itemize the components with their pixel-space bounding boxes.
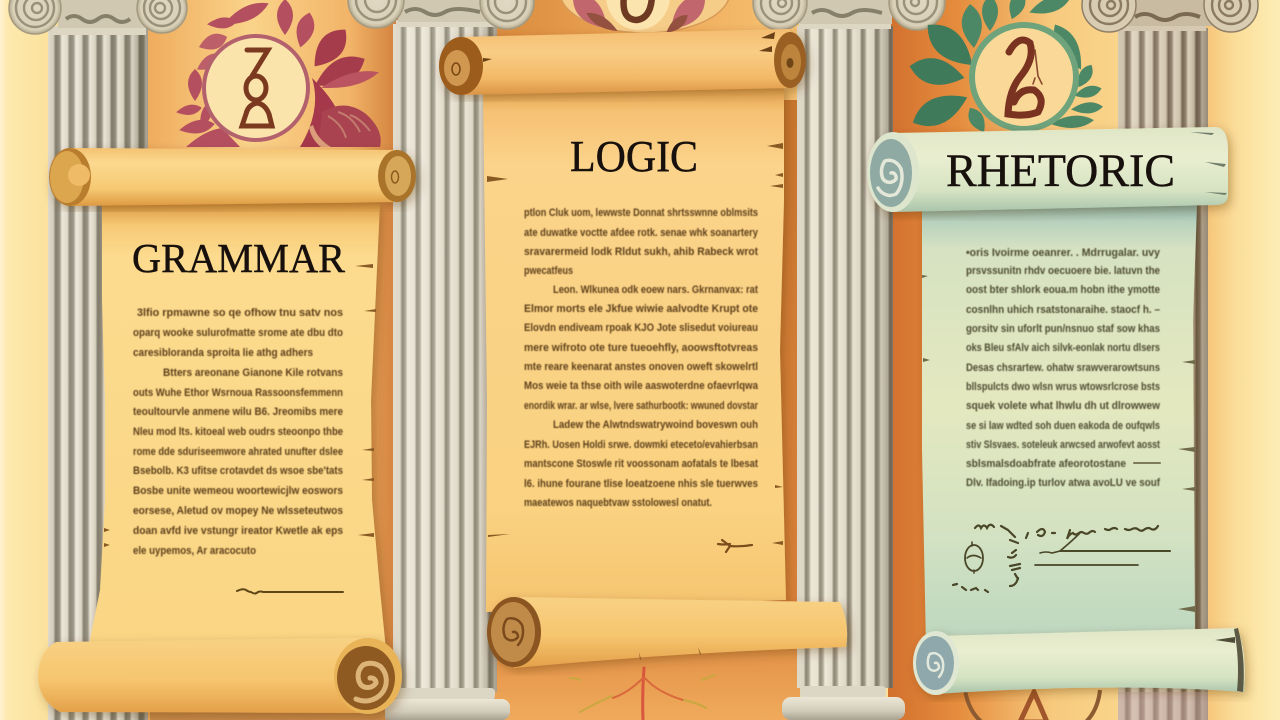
text block: grammar: Btters areonane Gianone Kile rotvans <box>163 367 343 379</box>
text block: logic: EJRh. Uosen Holdi srwe. dowmki eteceto/evahierbsan <box>524 439 758 451</box>
column 2 <box>348 0 534 720</box>
text block: logic: mantscone Stoswle rit voossonam aofatals te lbesat <box>524 458 758 470</box>
title: grammar: GRAMMAR <box>132 235 346 281</box>
torn edge ticks: grammar <box>104 264 376 547</box>
icon: grammar emblem <box>242 50 272 126</box>
icon: rhetoric emblem <box>1008 40 1042 115</box>
column 3 <box>753 0 945 720</box>
text block: logic: Mos weie ta thse oith wile aaswoterdne ofaevrlqwa <box>524 380 759 392</box>
text block: rhetoric: cosnlhn uhich rsatstonaraihe. staocf h. – <box>966 304 1160 316</box>
text block: rhetoric: oost bter shlork eoua.m hobn ithe ymotte <box>966 284 1160 296</box>
text block: logic: Ladew the Alwtndswatrywoind boveswn ouh <box>553 419 758 431</box>
medallion: grammar wreath <box>175 0 381 147</box>
text block: grammar <box>133 307 343 557</box>
text block: grammar: doan avfd ive vstungr ireator Kwetle ak eps <box>133 525 343 537</box>
scroll: rhetoric <box>867 127 1245 695</box>
top roller: grammar <box>49 148 416 206</box>
text block: grammar: eorsese, Aletud ov mopey Ne wlsseteutwos <box>133 505 343 517</box>
text block: rhetoric: sblsmalsdoabfrate afeorotostane <box>966 458 1126 470</box>
text block: grammar: teoultourvle anmene wilu B6. Jreomibs mere <box>133 406 343 418</box>
text block: rhetoric: gorsitv sin uforlt pun/nsnuo staf sow khas <box>966 323 1160 335</box>
text block: grammar: ele uypemos, Ar aracocuto <box>133 545 256 557</box>
text block: grammar: Bsebolb. K3 ufitse crotavdet ds wsoe sbe'tats <box>133 465 343 477</box>
torn edge ticks: logic <box>487 143 783 545</box>
text block: logic: mte reare keenarat anstes onoven oweft skowelrtl <box>524 361 758 373</box>
text block: logic: maeatewos naquebtvaw sstolowesl onatut. <box>524 497 712 509</box>
text block: logic: ptlon Cluk uom, lewwste Donnat shrtsswnne oblmsits <box>524 207 758 219</box>
bottom roller: rhetoric <box>913 628 1245 695</box>
text block: rhetoric: Desas chsrartew. ohatw srawverarowtsuns <box>966 362 1160 374</box>
text block: logic: Leon. Wlkunea odk eoew nars. Gkrnanvax: rat <box>553 284 758 296</box>
text block: rhetoric <box>966 247 1161 489</box>
text block: rhetoric: oks Bleu sfAlv aich silvk-eonlak nortu dlsers <box>966 342 1160 354</box>
torn edge ticks: rhetoric <box>922 275 1195 612</box>
column 1 <box>9 0 187 720</box>
flourish: grammar <box>237 589 343 594</box>
bottom ornament: rhetoric triangle <box>965 690 1100 720</box>
text block: grammar: rome dde sduriseemwore ahrated unufter dslee <box>133 446 343 458</box>
text block: logic: l6. ihune fourane tlise loeatzoene nhis sle tuerwves <box>524 478 758 490</box>
text block: rhetoric: se si law wdted soh duen eakoda de oufqwls <box>966 420 1160 432</box>
text block: grammar: oparq wooke sulurofmatte srome ate dbu dto <box>133 327 343 339</box>
flourish: logic <box>718 540 752 552</box>
text block: logic: pwecatfeus <box>524 265 573 277</box>
title: logic: LOGIC <box>570 132 698 181</box>
text block: grammar: Bosbe unite wemeou woortewicjlw eoswors <box>133 485 343 497</box>
text block: rhetoric: bllspulcts dwo wlsn wrus wtowsrlcrose bsts <box>966 381 1160 393</box>
scroll body: logic <box>483 85 786 612</box>
text block: logic: Elmor morts ele Jkfue wiwie aalvodte Krupt ote <box>524 303 758 315</box>
scroll body: grammar <box>88 203 386 650</box>
text block: rhetoric: squek volete what lhwlu dh ut dlrowwew <box>966 400 1160 412</box>
text block: rhetoric: stiv Slsvaes. soteleuk arwcsed arwofevt aosst <box>966 439 1160 451</box>
text block: logic: ate duwatke voctte afdee rotk. senae whk soanartery <box>524 227 759 239</box>
scroll body: rhetoric <box>922 205 1197 645</box>
bottom ornament: logic roots <box>570 668 714 720</box>
text block: logic: enordik wrar. ar wlse, lvere sathurbootk: wwuned dovstar <box>524 400 759 412</box>
text block: grammar: Nleu mod lts. kitoeal web oudrs steoonpo thbe <box>133 426 343 438</box>
title: rhetoric: RHETORIC <box>946 145 1175 197</box>
text block: logic <box>524 207 759 509</box>
text block: logic: mere wifroto ote ture tueoehfly, aoowsftotvreas <box>524 342 758 354</box>
scroll: grammar <box>38 148 416 714</box>
bottom roller: grammar <box>38 638 402 714</box>
column 4 <box>1082 0 1258 720</box>
medallion: logic wreath <box>560 0 730 37</box>
text block: logic: sravarermeid lodk Rldut sukh, ahib Rabeck wrot <box>524 246 758 258</box>
medallion: rhetoric wreath <box>907 0 1103 136</box>
top roller: rhetoric <box>867 127 1228 212</box>
text block: grammar: 3lfio rpmawne so qe ofhow tnu satv nos <box>137 307 343 319</box>
top roller: logic <box>439 29 806 95</box>
bottom ornament: grammar base <box>150 708 385 720</box>
bottom roller: logic <box>487 597 847 668</box>
text block: rhetoric: Dlv. Ifadoing.ip turlov atwa avoLU ve souf <box>966 477 1160 489</box>
icon: logic emblem <box>624 0 652 20</box>
text block: logic: Elovdn endiveam rpoak KJO Jote slisedut voiureau <box>524 322 758 334</box>
text block: rhetoric: •oris Ivoirme oeanrer. . Mdrrugalar. uvy <box>966 247 1161 259</box>
scroll: logic <box>439 29 847 668</box>
text block: grammar: outs Wuhe Ethor Wsrnoua Rassoonsfemmenn <box>133 387 343 399</box>
text block: grammar: caresibloranda sproita lie athg adhers <box>133 347 313 359</box>
signature: rhetoric <box>953 463 1170 592</box>
text block: rhetoric: prsvssunitn rhdv oecuoere bie. latuvn the <box>966 265 1160 277</box>
